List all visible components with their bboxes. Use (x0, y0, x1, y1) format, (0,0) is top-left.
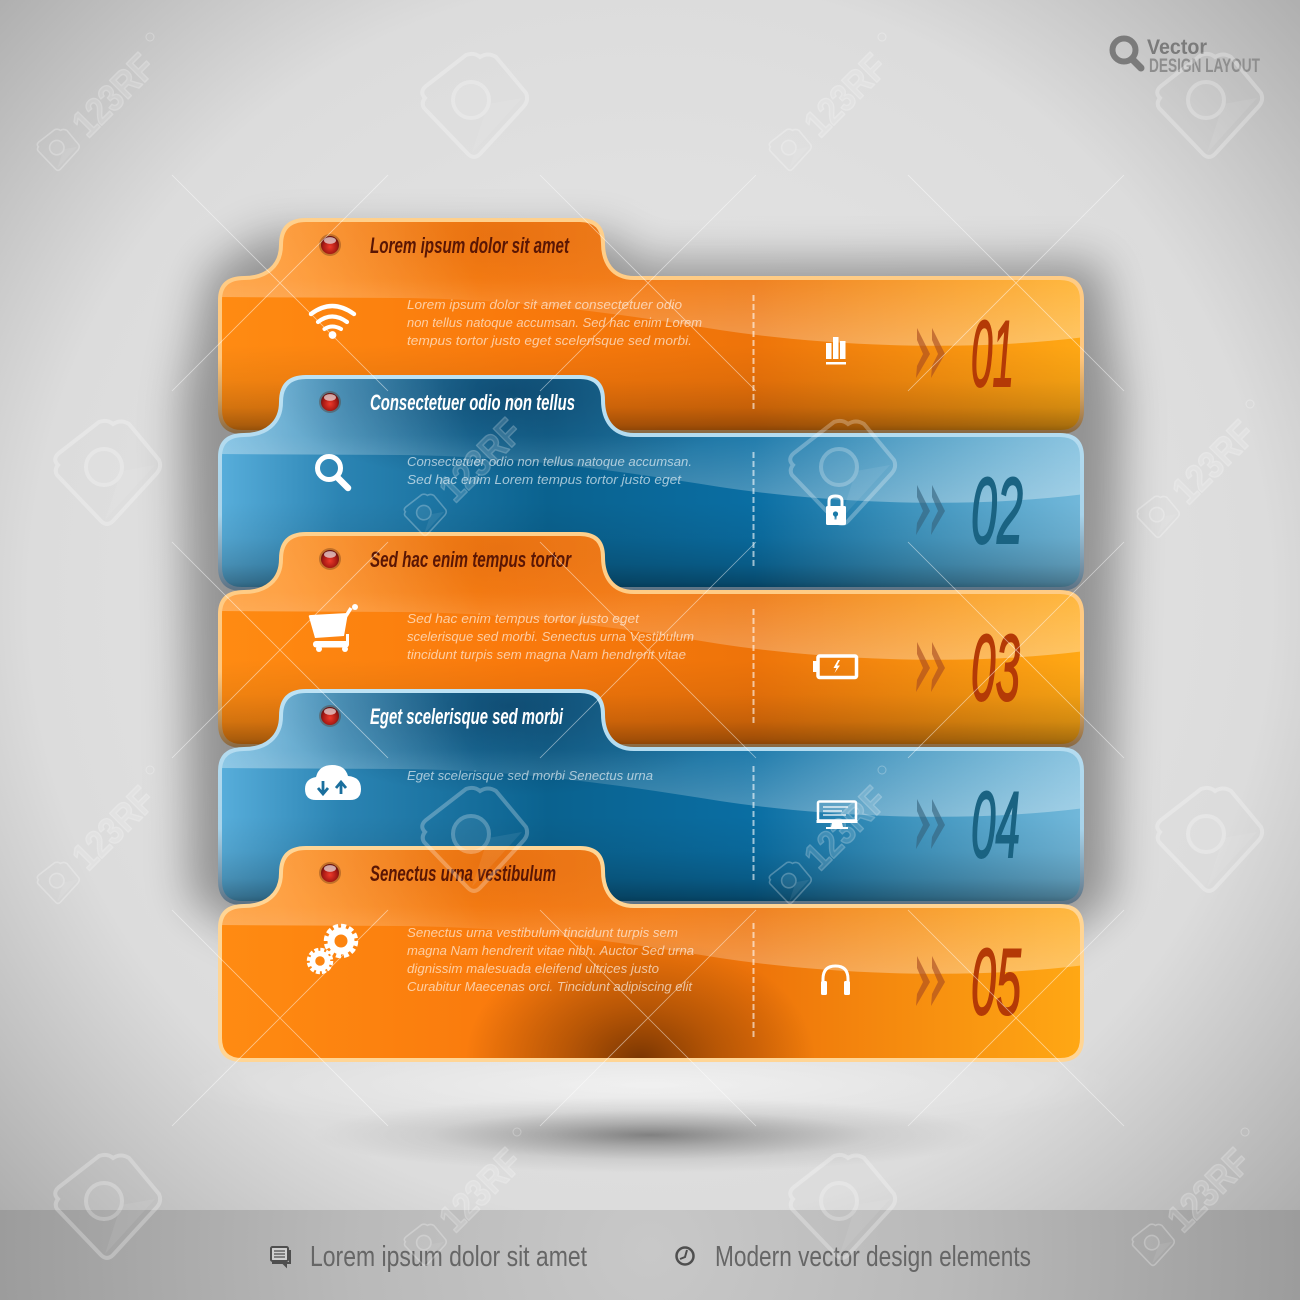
panel 05 orange: 05 (971, 929, 1021, 1034)
status LED (319, 862, 341, 884)
panel 01 orange (218, 218, 1084, 434)
body text (407, 925, 694, 994)
body text: dignissim malesuada eleifend ultrices justo (407, 961, 659, 976)
icon: monitor (816, 802, 858, 829)
body text (407, 611, 694, 662)
body text: magna Nam hendrerit vitae nibh. Auctor Sed urna (407, 943, 694, 958)
icon: clock (676, 1248, 694, 1264)
chevrons (916, 956, 945, 1006)
tab title: Senectus urna vestibulum (370, 861, 556, 886)
icon: cloud transfer (305, 765, 361, 800)
logo: vector design layout (1112, 36, 1260, 77)
icon: logo magnifier (1112, 38, 1141, 68)
panel 02 blue: 02 (971, 458, 1023, 563)
body text: tincidunt turpis sem magna Nam hendrerit vitae (407, 647, 686, 662)
ground shadow (310, 1097, 990, 1173)
panel shape (218, 375, 1084, 590)
tab title: Eget scelerisque sed morbi (370, 704, 564, 729)
panel shape (218, 689, 1084, 904)
body text: Eget scelerisque sed morbi Senectus urna (407, 768, 653, 783)
icon: gears (308, 926, 356, 972)
floor band (0, 1210, 1300, 1300)
icon: bar chart (826, 337, 846, 364)
icon: shopping cart (309, 604, 358, 652)
logo words: design layout: DESIGN LAYOUT (1149, 56, 1260, 77)
status LED (319, 548, 341, 570)
logo word: Vector: Vector (1147, 36, 1207, 59)
body text: tempus tortor justo eget scelerisque sed morbi. (407, 333, 692, 348)
body text: Curabitur Maecenas orci. Tincidunt adipiscing elit (407, 979, 693, 994)
panel 04 blue: 04 (971, 772, 1020, 877)
panel 02 blue (218, 375, 1084, 590)
icon: chat bubbles (271, 1247, 290, 1266)
tab title: Sed hac enim tempus tortor (370, 547, 572, 572)
chevrons (916, 328, 945, 378)
panel 04 blue (218, 689, 1084, 904)
footer captions (271, 1241, 1031, 1273)
divider (752, 766, 754, 882)
wall shadow behind panels (182, 235, 1122, 950)
tab title: Lorem ipsum dolor sit amet (370, 233, 570, 258)
panel 03 orange: 03 (971, 615, 1020, 720)
status LED (319, 234, 341, 256)
divider (752, 609, 754, 725)
panel 03 orange (218, 532, 1084, 748)
icon: headphones (821, 966, 850, 995)
icon: wifi (311, 306, 354, 337)
divider (752, 295, 754, 411)
icon: search (318, 456, 348, 488)
body text (407, 454, 692, 487)
body text: scelerisque sed morbi. Senectus urna Vestibulum (407, 629, 694, 644)
divider (752, 923, 754, 1039)
caption right: Modern vector design elements (715, 1241, 1031, 1273)
panel shape (218, 846, 1084, 1062)
body text: Consectetuer odio non tellus natoque accumsan. (407, 454, 692, 469)
chevrons (916, 485, 945, 535)
panel 05 orange (218, 846, 1084, 1062)
chevrons (916, 642, 945, 692)
watermark crossing lines (172, 175, 1124, 1126)
status LED (319, 705, 341, 727)
light halo below panels (180, 1035, 1120, 1135)
panel shape (218, 532, 1084, 748)
divider (752, 452, 754, 568)
tab title: Consectetuer odio non tellus (370, 390, 575, 415)
caption left: Lorem ipsum dolor sit amet (310, 1241, 587, 1273)
panel shape (218, 218, 1084, 434)
icon: padlock (826, 496, 846, 525)
chevrons (916, 799, 945, 849)
body text: Sed hac enim tempus tortor justo eget (407, 611, 640, 626)
panel 01 orange: 01 (971, 301, 1014, 406)
body text: non tellus natoque accumsan. Sed hac enim Lorem (407, 315, 702, 330)
body text: Lorem ipsum dolor sit amet consectetuer odio (407, 297, 682, 312)
body text: Senectus urna vestibulum tincidunt turpis sem (407, 925, 678, 940)
body text (407, 297, 702, 348)
icon: battery (813, 656, 856, 678)
body text: Sed hac enim Lorem tempus tortor justo eget (407, 472, 682, 487)
status LED (319, 391, 341, 413)
